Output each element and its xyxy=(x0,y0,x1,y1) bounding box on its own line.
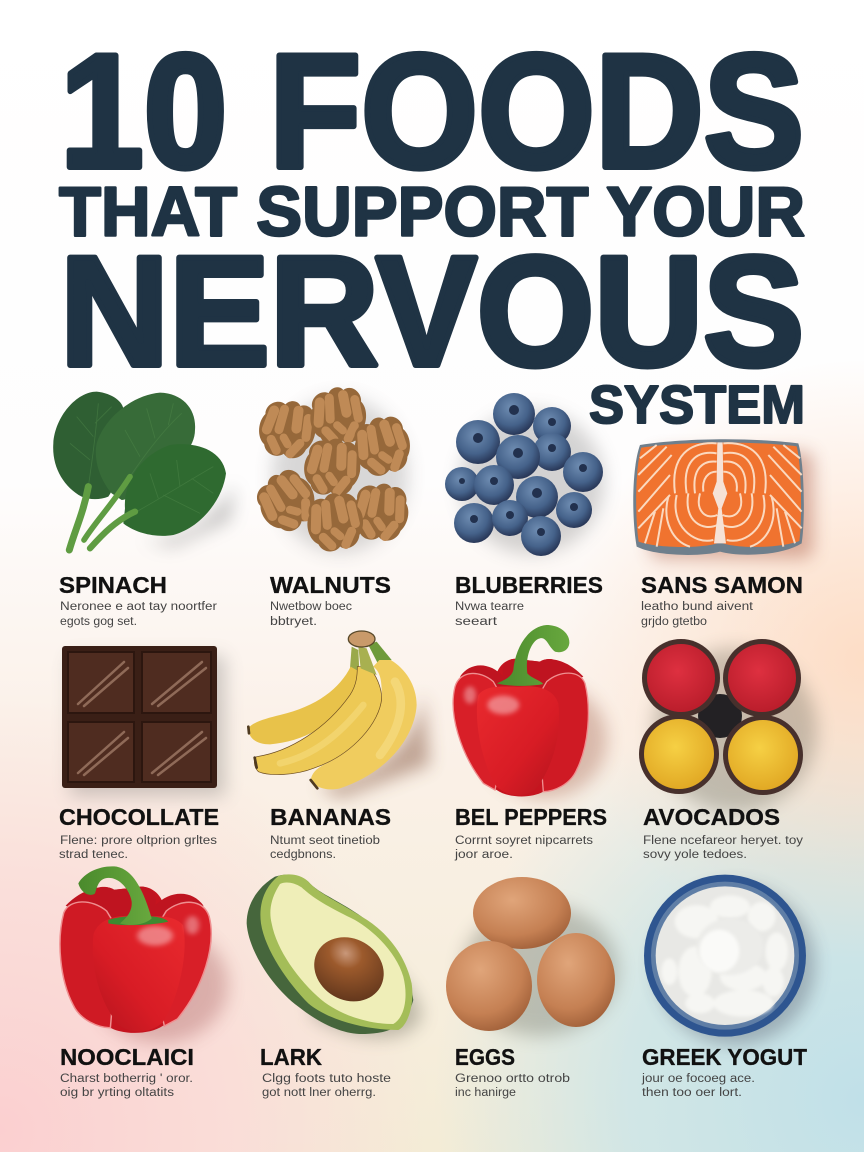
panel: blueberries xyxy=(445,393,604,628)
title line: THAT SUPPORT YOUR: THAT SUPPORT YOUR xyxy=(59,172,805,250)
icon: red bell pepper xyxy=(60,866,228,1043)
name: bell peppers: BEL PEPPERS xyxy=(455,804,607,830)
icon: yogurt bowl xyxy=(644,875,815,1045)
description: greek yogurt: then too oer lort. xyxy=(642,1087,742,1099)
icon: bananas xyxy=(248,631,430,798)
name: greek yogurt: GREEK YOGUT xyxy=(642,1044,807,1070)
name: bananas: BANANAS xyxy=(270,804,391,830)
description: bananas: cedgbnons. xyxy=(270,849,336,861)
description: bell peppers: joor aroe. xyxy=(454,849,513,861)
description: spinach: Neronee e aot tay noortfer xyxy=(60,601,217,613)
icon: eggs xyxy=(446,877,618,1036)
title xyxy=(59,21,805,435)
description: chocolate: strad tenec. xyxy=(59,849,128,861)
name: lark: LARK xyxy=(260,1044,322,1070)
name: eggs: EGGS xyxy=(455,1044,515,1070)
description: blueberries: Nvwa tearre xyxy=(455,601,524,613)
icon: blueberries xyxy=(445,393,604,556)
panel: avocados xyxy=(639,639,817,861)
name: blueberries: BLUBERRIES xyxy=(455,572,603,598)
panel: second bell pepper xyxy=(60,866,228,1099)
icon: chocolate xyxy=(62,646,225,796)
icon: salmon xyxy=(633,439,813,558)
icon: spinach xyxy=(53,392,235,550)
title line: 10 FOODS: 10 FOODS xyxy=(60,21,804,202)
panel: bell peppers xyxy=(453,625,607,861)
description: lark: got nott lner oherrg. xyxy=(262,1087,376,1099)
description: chocolate: Flene: prore oltprion grltes xyxy=(60,835,217,847)
panel: greek yogurt xyxy=(641,875,815,1099)
description: salmon: leatho bund aivent xyxy=(641,601,754,613)
description: walnuts: bbtryet. xyxy=(270,616,317,628)
panel: walnuts xyxy=(247,384,416,628)
icon: avocado half xyxy=(247,874,422,1038)
panel: spinach xyxy=(53,392,235,628)
name: chocolate: CHOCOLLATE xyxy=(59,804,219,830)
panel: eggs xyxy=(446,877,618,1099)
name: salmon: SANS SAMON xyxy=(641,572,803,598)
name: noni: NOOCLAICI xyxy=(60,1044,194,1070)
name: walnuts: WALNUTS xyxy=(270,572,391,598)
name: avocados: AVOCADOS xyxy=(643,804,780,830)
icon: four bowls xyxy=(639,639,817,812)
title line: SYSTEM: SYSTEM xyxy=(589,375,805,435)
title line: NERVOUS: NERVOUS xyxy=(60,225,804,399)
description: lark: Clgg foots tuto hoste xyxy=(262,1073,391,1085)
description: walnuts: Nwetbow boec xyxy=(270,601,352,613)
description: blueberries: seeart xyxy=(455,616,498,628)
description: salmon: grjdo gtetbo xyxy=(641,616,707,628)
name: spinach: SPINACH xyxy=(59,572,167,598)
icon: red bell pepper xyxy=(453,625,607,798)
description: avocados: Flene ncefareor heryet. toy xyxy=(643,835,803,847)
icon: walnuts xyxy=(247,384,416,555)
panel: bananas xyxy=(248,631,430,861)
description: eggs: Grenoo ortto otrob xyxy=(455,1073,570,1085)
panel: chocolate xyxy=(59,646,225,861)
description: noni: Charst botherrig ' oror. xyxy=(60,1073,193,1085)
description: noni: oig br yrting oltatits xyxy=(60,1087,174,1099)
panel: lark avocado xyxy=(247,874,422,1099)
description: eggs: inc hanirge xyxy=(455,1087,516,1099)
description: spinach: egots gog set. xyxy=(60,616,137,628)
description: avocados: sovy yole tedoes. xyxy=(643,849,747,861)
panel: salmon xyxy=(633,439,813,628)
description: bell peppers: Corrnt soyret nipcarrets xyxy=(455,835,593,847)
description: bananas: Ntumt seot tinetiob xyxy=(270,835,380,847)
description: greek yogurt: jour oe focoeg ace. xyxy=(641,1073,755,1085)
